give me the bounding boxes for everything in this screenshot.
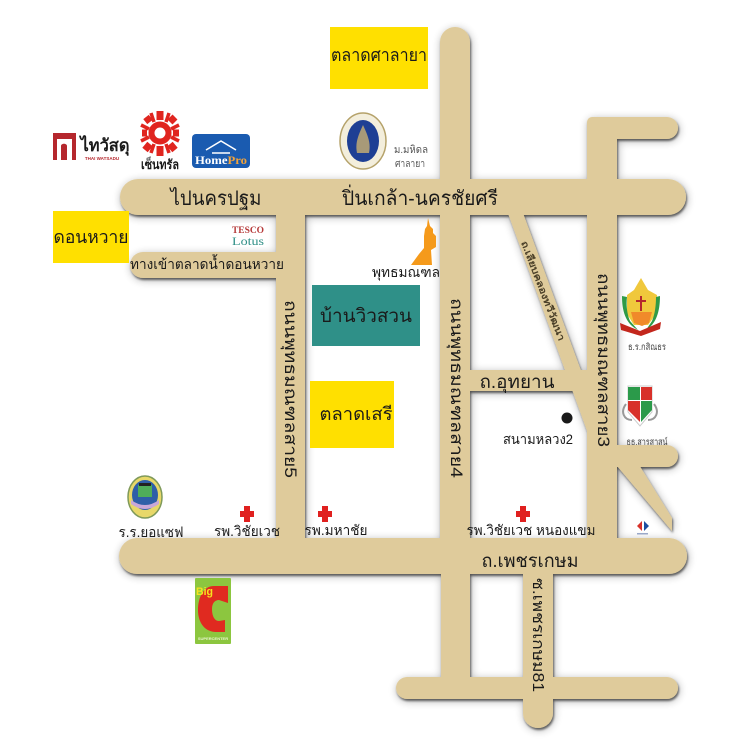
road: top right branch (587, 117, 678, 139)
label: Mahachai hospital: รพ.มหาชัย (304, 522, 368, 538)
logo: Thai Watsadu: THAI WATSADU (85, 156, 119, 161)
road label: Liap Khlong Thawi Watthana: ถ.เลียบคลองทวีวัฒนา (518, 239, 567, 343)
logo: Tesco Lotus (230, 223, 266, 248)
logo: Carrefour (637, 521, 649, 534)
label box: Baan View Suan (project location) (312, 285, 420, 346)
label: Joseph school: ร.ร.ยอแซฟ (118, 524, 184, 540)
label: Sanam Luang 2: สนามหลวง2 (503, 431, 573, 447)
road label: Phutthamonthon Sai 4: ถนนพุทธมณฑลสาย4 (446, 298, 466, 478)
icon: red cross, Mahachai hospital (318, 506, 332, 522)
logo: Central sun: เซ็นทรัล (141, 155, 179, 172)
logo: Sarasas school crest (623, 386, 657, 426)
label box: Seri market (310, 381, 394, 448)
label: Kasintorn school: ธ.ร.กสิณธร (628, 342, 666, 353)
logo: Big C (195, 578, 231, 644)
road label: to Nakhon Pathom: ไปนครปฐม (169, 187, 262, 210)
icon: red cross, Wichaiwet Nong Khaem hospital (516, 506, 530, 522)
logo: Kasintorn school crest (620, 278, 661, 336)
label box: Salaya market (330, 27, 428, 89)
label: Wichaiwet hospital: รพ.วิชัยเวช (214, 523, 280, 539)
label box: Don Wai: ดอนหวาย (54, 227, 128, 247)
road label: Soi Phetkasem 81: ซ.เพชรเกษม81 (529, 578, 546, 692)
label box: Seri market: ตลาดเสรี (320, 404, 393, 424)
label: Mahidol Salaya: ศาลายา (395, 158, 425, 170)
logo: Big C: Big (196, 586, 213, 598)
logo: HomePro (192, 134, 250, 168)
road: Utthayan (460, 370, 595, 391)
logo: Thai Watsadu (53, 133, 130, 161)
road: lower right diagonal (612, 460, 672, 531)
road label: Phutthamonthon Sai 5: ถนนพุทธมณฑลสาย5 (280, 300, 300, 478)
label: Mahidol Salaya (394, 144, 428, 170)
road: Phetkasem (119, 538, 687, 574)
logo: Thai Watsadu: ไทวัสดุ (79, 135, 130, 156)
logo: Tesco Lotus: TESCO (232, 225, 264, 235)
road label: Phutthamonthon Sai 3: ถนนพุทธมณฑลสาย3 (593, 273, 613, 447)
road label: Phetkasem road: ถ.เพชรเกษม (482, 551, 578, 572)
road: Pinklao-Nakhon Chai Si highway (120, 179, 686, 215)
road: Phutthamonthon Sai 3 (587, 125, 617, 545)
icon: red cross, Wichaiwet hospital (240, 506, 254, 522)
road network (119, 27, 687, 728)
road: Don Wai market entrance (130, 252, 290, 278)
icon: Buddha statue (411, 218, 436, 265)
road: lower right branch (605, 445, 678, 467)
logo: Tesco Lotus: Lotus (232, 234, 264, 248)
logo: Joseph school crest (128, 476, 162, 518)
label: Wichaiwet Nong Khaem hospital: รพ.วิชัยเวช หนองแขม (466, 522, 596, 538)
label box: Don Wai (53, 211, 129, 263)
road: Soi Phetkasem 81 (523, 560, 553, 728)
marker: Sanam Luang 2 (562, 412, 572, 424)
label: Phutthamonthon: พุทธมณฑล (372, 264, 440, 281)
road label: Utthayan road: ถ.อุทยาน (480, 372, 555, 394)
road: bottom cross street (396, 677, 678, 699)
logo: Mahidol University (340, 113, 386, 169)
logo: HomePro: HomePro (195, 153, 247, 167)
road label: Don Wai floating market entrance: ทางเข้าตลาดน้ำดอนหวาย (130, 254, 284, 272)
road: Liap Khlong Thawi Watthana (505, 205, 601, 450)
road label: Pinklao-Nakhon Chai Si: ปิ่นเกล้า-นครชัยศรี (342, 184, 498, 210)
logo: Big C: SUPERCENTER (198, 636, 228, 641)
label box: Salaya market: ตลาดศาลายา (331, 45, 427, 65)
label: Sarasas school: ธธ.สารสาสน์ (626, 436, 668, 448)
logo: Central sun (141, 111, 179, 172)
road: Phutthamonthon Sai 5 (276, 200, 305, 550)
label box: Baan View Suan (project location): บ้านวิวสวน (320, 306, 412, 327)
road: Phutthamonthon Sai 4 (440, 27, 470, 680)
label: Mahidol Salaya: ม.มหิดล (394, 144, 428, 156)
